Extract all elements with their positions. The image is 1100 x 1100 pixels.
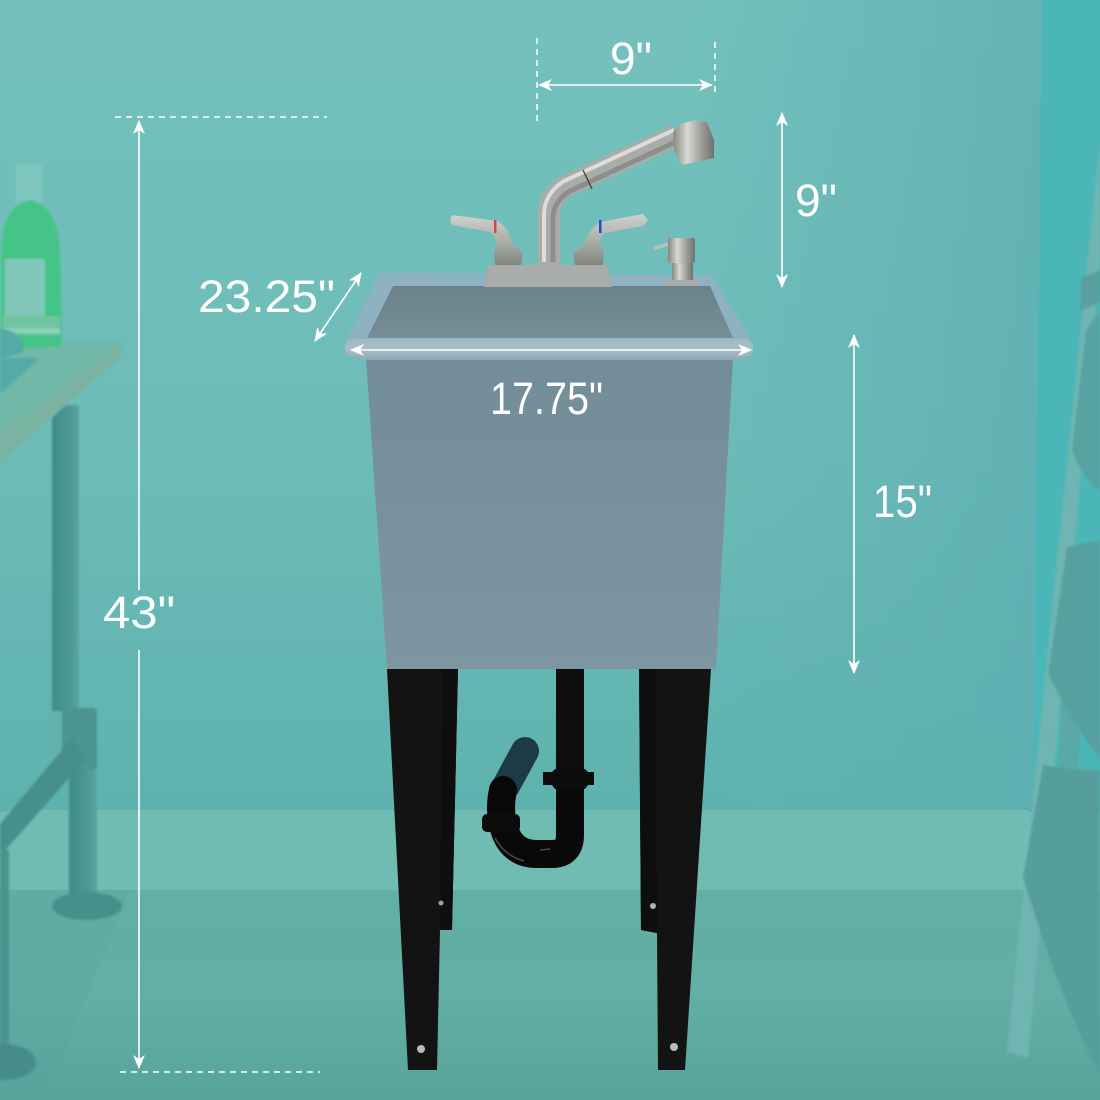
left foot	[0, 1044, 36, 1080]
sink rim back	[345, 273, 753, 355]
right front leg	[639, 669, 711, 1070]
left leg inner shade	[440, 669, 458, 930]
right wall section	[1033, 0, 1100, 812]
faucet spout	[544, 130, 680, 265]
ladder rail	[1007, 140, 1100, 1058]
tub height arrow	[853, 335, 855, 673]
label: 9 inches: 9"	[610, 33, 652, 84]
blanket middle	[1048, 540, 1100, 760]
slip nut	[543, 769, 594, 789]
label: 23.25 inches: 23.25"	[198, 271, 335, 322]
bottle	[1, 165, 62, 348]
leg bolts	[417, 900, 678, 1053]
label: 17.75 inches: 17.75"	[490, 373, 603, 424]
diagonal brace	[0, 738, 87, 856]
table leg upper	[52, 405, 79, 711]
reach arrow	[539, 84, 712, 86]
blanket lower	[1023, 765, 1100, 1075]
dimension: tub depth 23.25 inches	[198, 271, 361, 341]
faucet height arrow	[781, 113, 783, 287]
depth arrow	[315, 273, 361, 341]
faucet base	[484, 265, 612, 287]
label: 15 inches: 15"	[873, 476, 932, 527]
right leg inner shade	[639, 669, 657, 933]
trap highlights	[495, 838, 550, 861]
back ladder rail	[1058, 695, 1082, 770]
cold handle	[573, 214, 648, 265]
blanket upper	[1072, 310, 1100, 491]
table leg lower	[69, 770, 97, 895]
sink tub body	[366, 358, 733, 669]
lower collar	[482, 814, 520, 832]
soap dispenser	[653, 238, 700, 286]
pipe fitting	[62, 708, 97, 770]
dashed guide lines	[115, 117, 327, 1072]
vertical tailpiece	[556, 669, 584, 775]
right ladder with blankets	[1007, 140, 1100, 1075]
floor plank shading	[0, 890, 130, 1100]
label: 43 inches: 43"	[103, 587, 175, 638]
height arrow	[138, 121, 140, 1068]
baseboard	[0, 810, 1028, 890]
p-trap bend	[501, 785, 570, 854]
hot handle	[450, 215, 523, 265]
shelf top	[0, 342, 123, 434]
table foot	[52, 892, 122, 920]
label: 9 inches: 9"	[795, 175, 837, 226]
folded towel	[0, 328, 40, 394]
left front leg	[387, 669, 458, 1070]
ladder clip	[1080, 270, 1100, 311]
width arrow	[351, 349, 751, 351]
drain pipe	[482, 669, 594, 861]
utility sink	[345, 120, 753, 1070]
open tube end	[506, 751, 525, 786]
shelf front edge	[0, 342, 123, 463]
left shelf with bottle and pipe table legs	[0, 165, 123, 1080]
rim front	[345, 339, 753, 360]
left pipe leg	[0, 850, 9, 1050]
sink basin	[367, 286, 733, 338]
floor	[0, 890, 1100, 1100]
dashed guides	[537, 38, 715, 122]
faucet head	[673, 120, 714, 165]
